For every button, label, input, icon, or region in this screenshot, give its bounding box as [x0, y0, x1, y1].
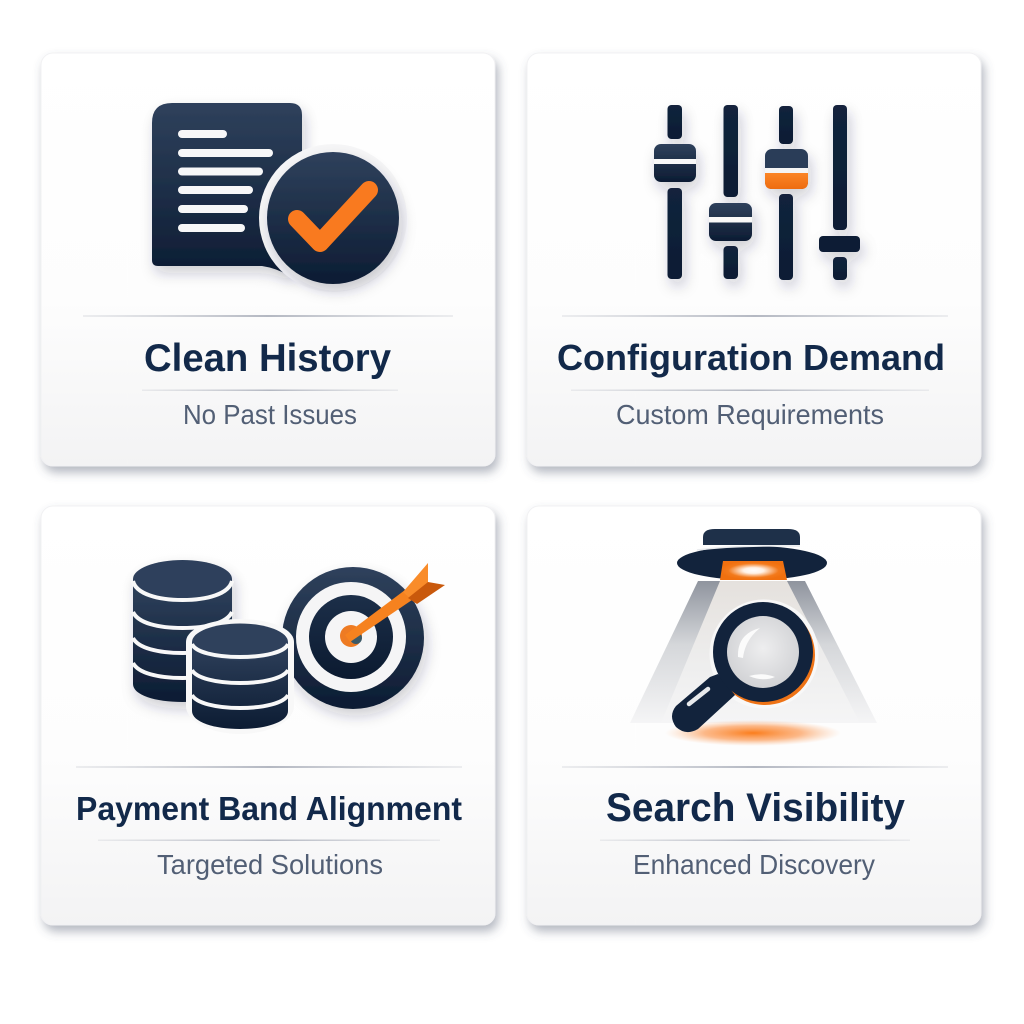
icon: back database stack [133, 560, 232, 702]
icon: front database stack [186, 619, 294, 734]
subtitle: Targeted Solutions [157, 849, 383, 880]
icon: sliders [654, 105, 860, 280]
heading: Configuration Demand [557, 337, 945, 378]
icon: document with check badge [152, 103, 407, 292]
panel: Clean History [41, 53, 495, 466]
subtitle: Custom Requirements [616, 399, 884, 430]
panel: Payment Band Alignment [41, 506, 495, 925]
heading: Search Visibility [606, 786, 906, 830]
subtitle: No Past Issues [183, 399, 357, 430]
panel: Search Visibility [527, 506, 981, 925]
panel: Configuration Demand [527, 53, 981, 466]
heading: Clean History [144, 337, 391, 380]
icon: target with arrow [282, 563, 445, 709]
heading: Payment Band Alignment [76, 790, 462, 827]
subtitle: Enhanced Discovery [633, 849, 875, 880]
icon: spotlight and magnifying glass [630, 529, 877, 746]
